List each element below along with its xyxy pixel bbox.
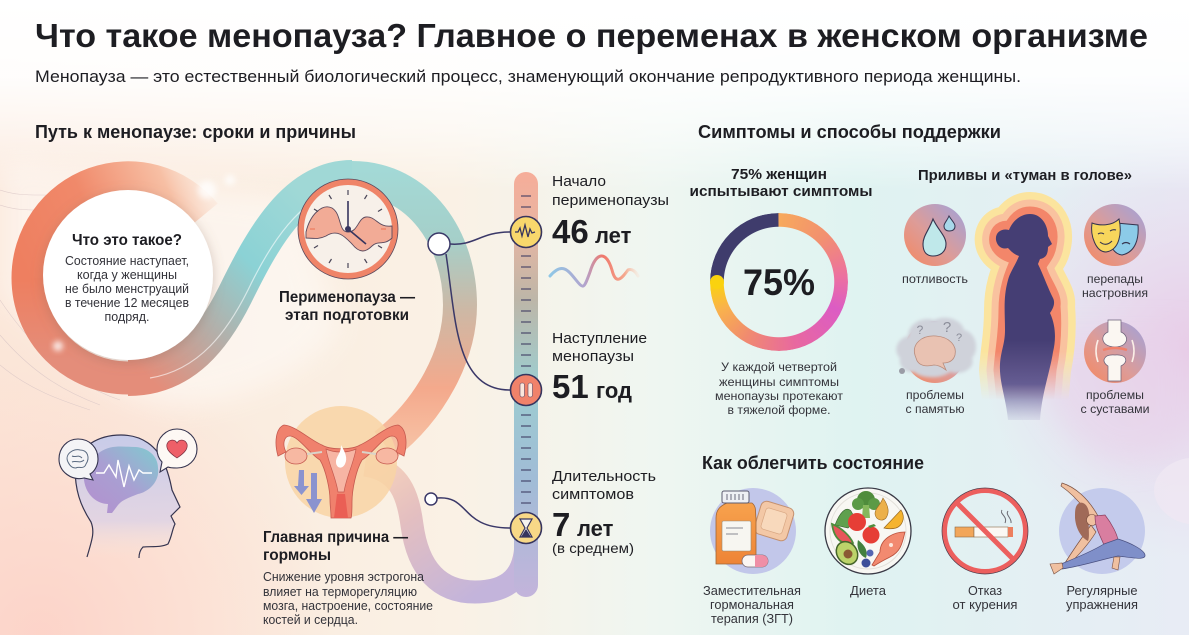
symptom: sweating: потливость <box>902 272 968 286</box>
figure: silhouette with heat aura <box>996 213 1055 420</box>
panel: what is it: подряд. <box>104 310 150 324</box>
symptom: joint problems: проблемы <box>1086 388 1144 402</box>
timeline stat: 7 years <box>552 468 656 556</box>
symptom: mood swings: перепады <box>1087 272 1143 286</box>
timeline stat: 51 years: менопаузы <box>552 348 634 365</box>
symptom: sweating <box>902 204 968 286</box>
timeline stat: 46 years: лет <box>595 223 632 248</box>
node: duration hourglass <box>510 512 542 544</box>
symptom: memory problems: ? <box>917 323 924 337</box>
panel: what is it: в течение 12 месяцев <box>65 296 189 310</box>
text: one in four: в тяжелой форме. <box>728 403 830 417</box>
connectors <box>437 232 510 528</box>
heading: how to ease: Как облегчить состояние <box>702 453 924 473</box>
chart: donut 75%: 75% <box>743 262 815 303</box>
symptom: memory problems <box>896 318 976 416</box>
timeline stat: 7 years: 7 <box>552 506 570 543</box>
timeline stat: 51 years: 51 <box>552 368 589 405</box>
panel: what is it: Состояние наступает, <box>65 254 189 268</box>
title: Что такое менопауза? Главное о переменах в женском организме <box>35 17 1148 54</box>
icon: hormone wave <box>550 256 638 286</box>
label: perimenopause: этап подготовки <box>285 307 409 324</box>
icon: uterus <box>276 406 406 518</box>
remedy: hormone therapy: Заместительная <box>703 584 801 598</box>
connector dot upper <box>428 233 450 255</box>
text: main cause hormones: Снижение уровня эстрогона <box>263 570 424 584</box>
text: one in four <box>715 360 844 417</box>
node: perimenopause start <box>510 216 542 248</box>
remedy: exercise: Регулярные <box>1066 584 1138 598</box>
remedy: diet <box>825 488 911 598</box>
remedy: quit smoking: Отказ <box>968 584 1002 598</box>
remedy: diet: Диета <box>850 584 886 598</box>
timeline stat: 51 years: Наступление <box>552 330 647 347</box>
thermometer scale <box>514 172 538 597</box>
bubble: brain <box>59 439 98 480</box>
panel: what is it: Что это такое? <box>72 232 182 249</box>
timeline stat: 7 years: Длительность <box>552 468 656 485</box>
text: main cause hormones: гормоны <box>263 547 331 564</box>
timeline stat: 7 years: (в среднем) <box>552 540 634 556</box>
text: main cause hormones: влияет на терморегуляцию <box>263 585 417 599</box>
panel: timeline ribbon <box>28 175 526 592</box>
text: main cause hormones <box>263 529 433 627</box>
brain signal <box>96 460 152 487</box>
icon: head with brain <box>59 429 197 558</box>
subtitle: Менопауза — это естественный биологический процесс, знаменующий окончание репродуктивного периода женщины. <box>35 67 1021 86</box>
timeline stat: 51 years: год <box>596 378 632 403</box>
remedy: quit smoking: от курения <box>952 598 1018 612</box>
symptom: memory problems: проблемы <box>906 388 964 402</box>
remedy: hormone therapy: терапия (ЗГТ) <box>711 612 793 626</box>
node: menopause onset <box>510 374 542 406</box>
timeline stat: 7 years: лет <box>577 516 614 541</box>
label: perimenopause: Перименопауза — <box>279 289 415 306</box>
label: perimenopause <box>279 289 415 324</box>
remedy: hormone therapy: гормональная <box>710 598 794 612</box>
connector dot lower <box>425 493 437 505</box>
symptom: memory problems: ? <box>956 332 962 344</box>
symptom: joint problems: с суставами <box>1080 402 1150 416</box>
text: main cause hormones: костей и сердца. <box>263 613 358 627</box>
text: one in four: У каждой четвертой <box>721 360 837 374</box>
bubble: heart <box>157 429 197 472</box>
heading: 75% women: 75% женщин <box>731 167 827 183</box>
symptom: memory problems: с памятью <box>906 402 964 416</box>
arrows down <box>294 470 322 513</box>
heading: 75% women: испытывают симптомы <box>690 184 872 200</box>
heading: symptoms and support: Симптомы и способы поддержки <box>698 122 1001 142</box>
panel: what is it: не было менструаций <box>65 282 189 296</box>
timeline stat: 46 years: 46 <box>552 213 589 250</box>
remedy: quit smoking <box>942 488 1028 612</box>
panel: what is it <box>43 190 213 360</box>
text: main cause hormones: мозга, настроение, состояние <box>263 599 433 613</box>
remedy: exercise: упражнения <box>1066 598 1138 612</box>
remedy: exercise <box>1050 483 1145 612</box>
brain <box>84 446 158 513</box>
symptom: mood swings <box>1082 204 1148 300</box>
text: one in four: менопаузы протекают <box>715 389 844 403</box>
heading: hot flashes and brain fog: Приливы и «туман в голове» <box>918 168 1132 184</box>
text: main cause hormones: Главная причина — <box>263 529 408 546</box>
timeline stat: 46 years: Начало <box>552 173 606 190</box>
timeline stat: 46 years: перименопаузы <box>552 192 669 209</box>
text: one in four: женщины симптомы <box>719 375 839 389</box>
heading: 75% women <box>690 167 872 200</box>
icon: clock <box>298 179 398 279</box>
timeline stat: 7 years: симптомов <box>552 486 634 503</box>
remedy: hormone therapy <box>703 488 801 626</box>
symptom: memory problems: ? <box>943 319 951 336</box>
panel: what is it: когда у женщины <box>77 268 177 282</box>
chart: donut 75% <box>710 213 848 351</box>
symptom: joint problems <box>1080 320 1150 416</box>
timeline stat: 51 years <box>552 330 647 405</box>
symptom: mood swings: настровния <box>1082 286 1148 300</box>
timeline stat: 46 years <box>552 173 669 250</box>
heading: path to menopause: Путь к менопаузе: сроки и причины <box>35 122 356 142</box>
